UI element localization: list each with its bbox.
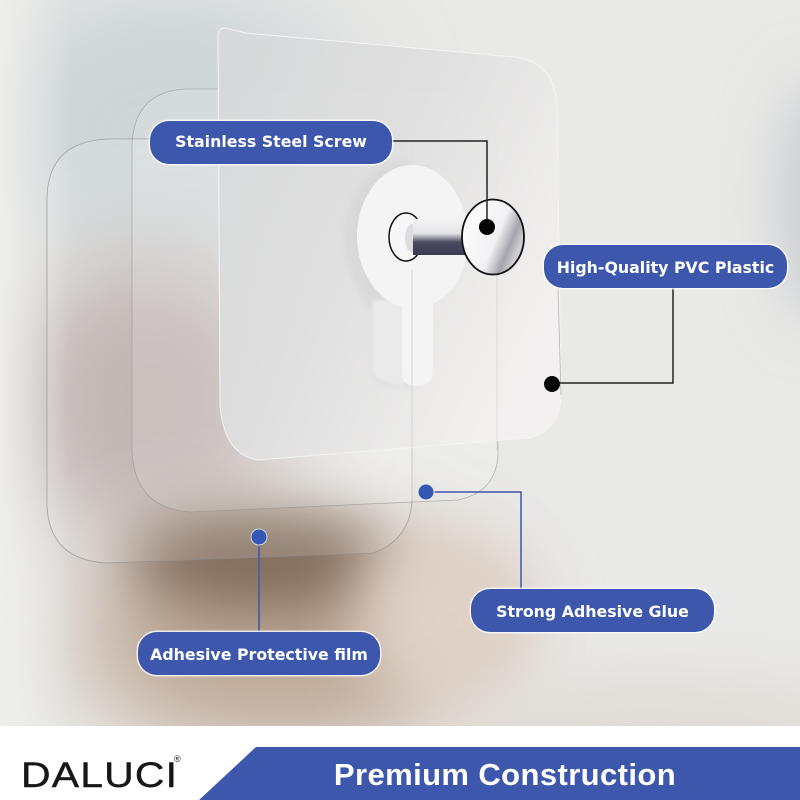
label: Strong Adhesive Glue xyxy=(471,589,714,632)
callout line: glue xyxy=(418,484,521,590)
label: Adhesive Protective film xyxy=(138,632,380,675)
adhesive protective film layer xyxy=(47,138,412,563)
footer title: Premium Construction xyxy=(334,757,676,792)
hook stem side xyxy=(372,300,404,386)
logo: DALUCI: DALUCI xyxy=(21,756,178,795)
callout line: PVC xyxy=(544,288,673,392)
callout line: screw xyxy=(392,141,495,235)
label: Stainless Steel Screw: Stainless Steel Screw xyxy=(175,132,367,151)
logo: DALUCI: ® xyxy=(174,754,181,764)
hook shadow xyxy=(345,160,420,386)
label: Strong Adhesive Glue: Strong Adhesive Glue xyxy=(496,602,689,621)
adhesive glue layer xyxy=(132,89,498,512)
label: High-Quality PVC Plastic xyxy=(544,245,787,288)
PVC plastic front plate xyxy=(218,28,561,460)
callout line: film xyxy=(251,529,267,633)
stainless steel screw xyxy=(389,200,524,274)
label: Adhesive Protective film: Adhesive Protective film xyxy=(150,645,368,664)
label: High-Quality PVC Plastic: High-Quality PVC Plastic xyxy=(557,258,774,277)
label: Stainless Steel Screw xyxy=(150,121,392,164)
white hook base xyxy=(357,165,468,386)
footer banner shape xyxy=(199,747,800,800)
